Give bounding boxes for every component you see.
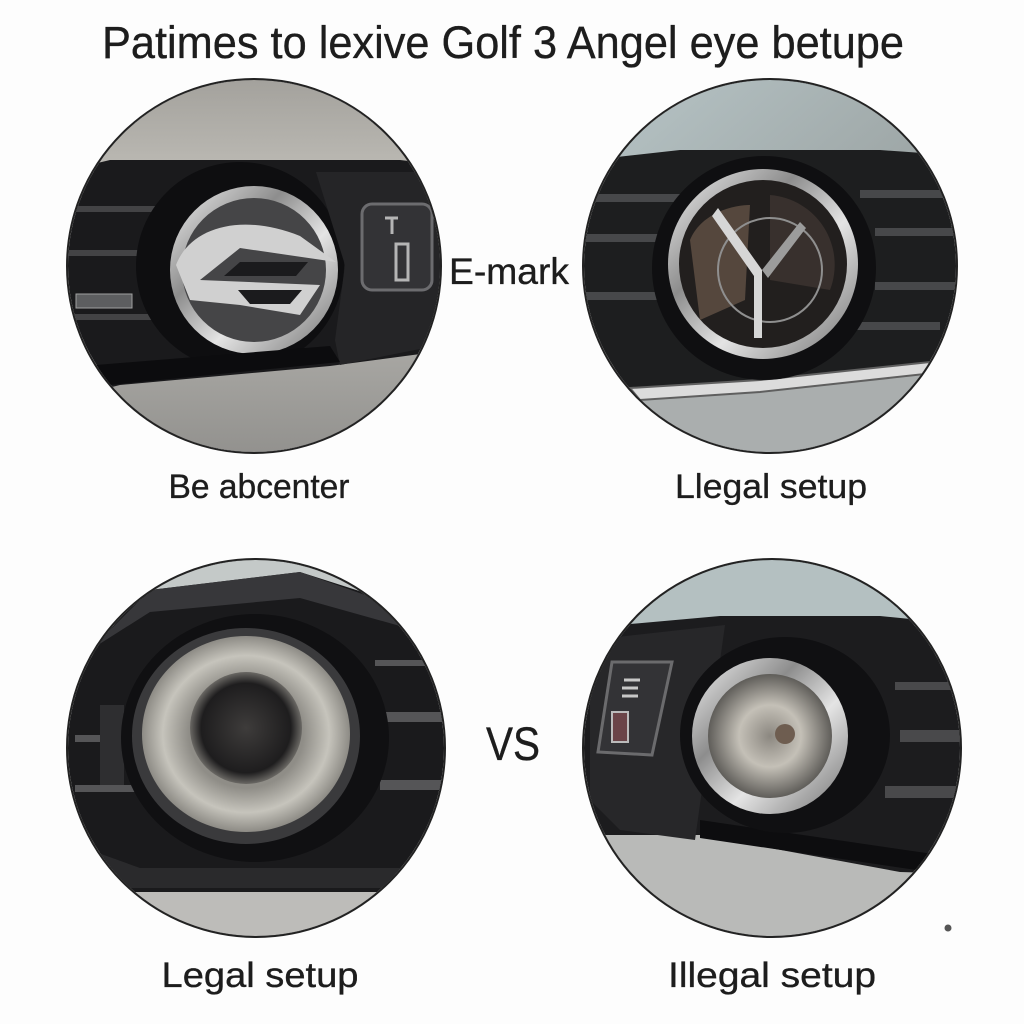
label: Illegal setup: Illegal setup [668,956,876,995]
badge plate [76,294,132,308]
housing [680,637,890,833]
lower bumper [632,375,920,452]
label: Llegal setup: Llegal setup [675,468,867,506]
panel: top right photo [584,80,956,452]
title: Patimes to lexive Golf 3 Angel eye betupe [102,17,904,68]
label: Legal setup: Legal setup [162,956,358,995]
grille slats [68,206,158,320]
panel: bottom left photo [68,560,444,936]
grille slats [885,682,965,798]
lower bumper [112,354,418,452]
decorative dot [944,924,952,932]
chrome strip [630,362,930,400]
switch [598,662,672,755]
lens [708,674,832,798]
lower bumper [606,835,913,936]
grille slats [75,660,450,792]
headlight housing [136,162,344,370]
chrome emblem [170,186,338,354]
housing [652,156,876,380]
panel: bottom right photo [584,560,960,936]
lower bumper [136,892,376,936]
outer lens disc [142,636,350,832]
ring: bottom left [67,559,445,937]
ring: top left [67,79,441,453]
chrome Y mark [712,208,762,338]
housing [121,614,389,862]
label: VS: VS [486,717,540,770]
switch housing [590,625,725,840]
label: E-mark: E-mark [449,251,569,292]
grille slats [585,190,955,330]
switch [362,204,432,290]
lens [679,180,847,348]
panel: top left photo [68,80,440,452]
inner lens [190,672,302,784]
hood [156,560,359,591]
hood [100,80,408,162]
switch housing [316,172,440,365]
chrome ring [692,658,848,814]
chrome ring [668,169,858,359]
hood [631,560,908,624]
label: Be abcenter: Be abcenter [168,468,350,506]
ring: top right [583,79,957,453]
ring: bottom right [583,559,961,937]
hood [620,80,918,157]
lower trim [96,346,340,385]
